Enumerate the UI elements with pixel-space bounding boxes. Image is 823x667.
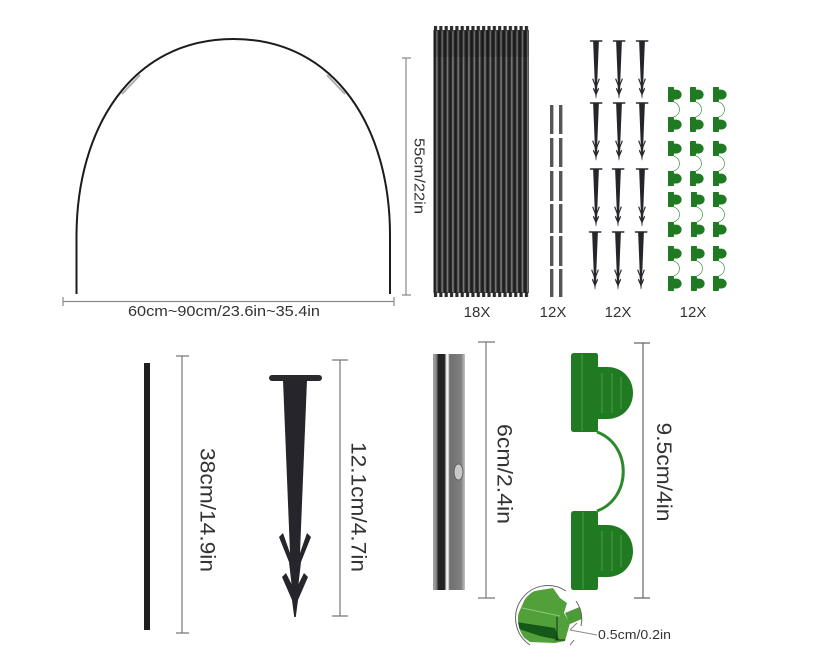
- clip ridges: [582, 354, 621, 589]
- tube dimension: 6cm/2.4in: [478, 342, 516, 598]
- quantity labels: 12X: [680, 304, 706, 321]
- stake dimension: 12.1cm/4.7in: [332, 360, 370, 616]
- quantity labels: 12X: [605, 304, 631, 321]
- quantity labels: 12X: [540, 304, 566, 321]
- rod dimension: 38cm/14.9in: [176, 356, 218, 633]
- height dimension: 55cm/22in: 55cm/22in: [410, 138, 426, 214]
- 12 ground stakes: [589, 40, 648, 289]
- height dimension: 55cm/22in: [402, 58, 426, 295]
- hoop connectors: [122, 75, 345, 94]
- rod dimension: 38cm/14.9in: 38cm/14.9in: [196, 448, 218, 572]
- bundle of 18 rods: [434, 26, 529, 297]
- quantity labels: [464, 304, 706, 321]
- large clip: [571, 353, 633, 590]
- large connector tube: [433, 354, 465, 590]
- tube dent: [454, 464, 463, 480]
- large rod: [144, 363, 150, 630]
- hoop arch: [76, 39, 390, 294]
- quantity labels: 18X: [464, 304, 490, 321]
- thickness callout: 0.5cm/0.2in: 0.5cm/0.2in: [598, 627, 671, 642]
- large stake: [269, 375, 322, 617]
- magnified clip detail: [516, 586, 584, 645]
- clip dimension: 9.5cm/4in: [634, 343, 675, 598]
- thickness callout: 0.5cm/0.2in: [570, 623, 671, 642]
- tube dimension: 6cm/2.4in: 6cm/2.4in: [492, 424, 516, 524]
- width dimension: 60cm~90cm: [63, 297, 394, 320]
- clip dimension: 9.5cm/4in: 9.5cm/4in: [652, 422, 675, 522]
- 12 green clips: [668, 87, 727, 291]
- width dimension: 60cm~90cm: 60cm~90cm/23.6in~35.4in: [128, 303, 320, 320]
- 12 connector tubes: [550, 105, 562, 297]
- stake dimension: 12.1cm/4.7in: 12.1cm/4.7in: [346, 442, 370, 572]
